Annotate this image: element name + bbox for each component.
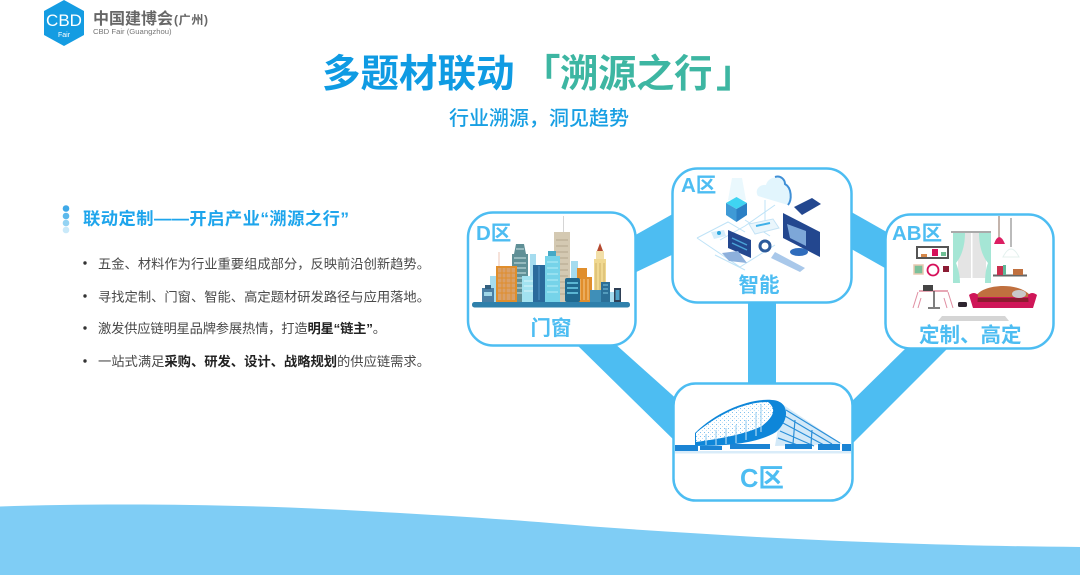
bullet list: 一站式满足采购、研发、设计、战略规划的供应链需求。: [98, 353, 430, 369]
connectors between zones: [574, 209, 951, 449]
zone label: AB区: AB区: [892, 222, 942, 245]
logo: CBD Fair: Fair: [58, 32, 71, 39]
bullet list: 五金、材料作为行业重要组成部分，反映前沿创新趋势。: [98, 256, 430, 272]
title: 「: [522, 53, 561, 96]
logo: CBD Fair: CBD Fair (Guangzhou): [93, 27, 172, 36]
zone box: A: [672, 168, 852, 302]
subtitle: 行业溯源，洞见趋势: [449, 107, 629, 130]
category label: 智能: 智能: [738, 274, 780, 297]
zone box: C: [674, 384, 852, 500]
illustration: smart tech: [697, 177, 821, 272]
zone label: C区: C区: [740, 465, 784, 493]
title: 多题材联动: [322, 53, 515, 96]
section heading with dots: 联动定制——开启产业“溯源之行”: [83, 208, 349, 228]
logo: CBD Fair: CBD: [46, 11, 82, 30]
logo: CBD Fair: (广州): [174, 12, 208, 27]
logo: CBD Fair: [44, 0, 208, 46]
title: 溯源之行: [560, 53, 712, 96]
zone box: AB: [886, 214, 1054, 348]
bottom wave: [0, 504, 1080, 575]
illustration: convention centre: [675, 400, 851, 454]
illustration: furnished room: [913, 216, 1037, 321]
illustration: city skyline: [472, 216, 630, 308]
logo: CBD Fair: 中国建博会: [93, 9, 173, 28]
bullet list: 寻找定制、门窗、智能、高定题材研发路径与应用落地。: [98, 288, 430, 304]
zone label: A区: A区: [681, 174, 716, 197]
title: 」: [716, 53, 755, 96]
category label: 定制、高定: 定制、高定: [919, 323, 1022, 347]
bullet list: [83, 256, 430, 369]
zone label: D区: D区: [476, 222, 511, 245]
zone box: D: [468, 212, 636, 346]
section heading with dots: [63, 205, 349, 233]
category label: 门窗: 门窗: [530, 317, 572, 340]
bullet list: 激发供应链明星品牌参展热情，打造明星“链主”。: [98, 320, 386, 336]
